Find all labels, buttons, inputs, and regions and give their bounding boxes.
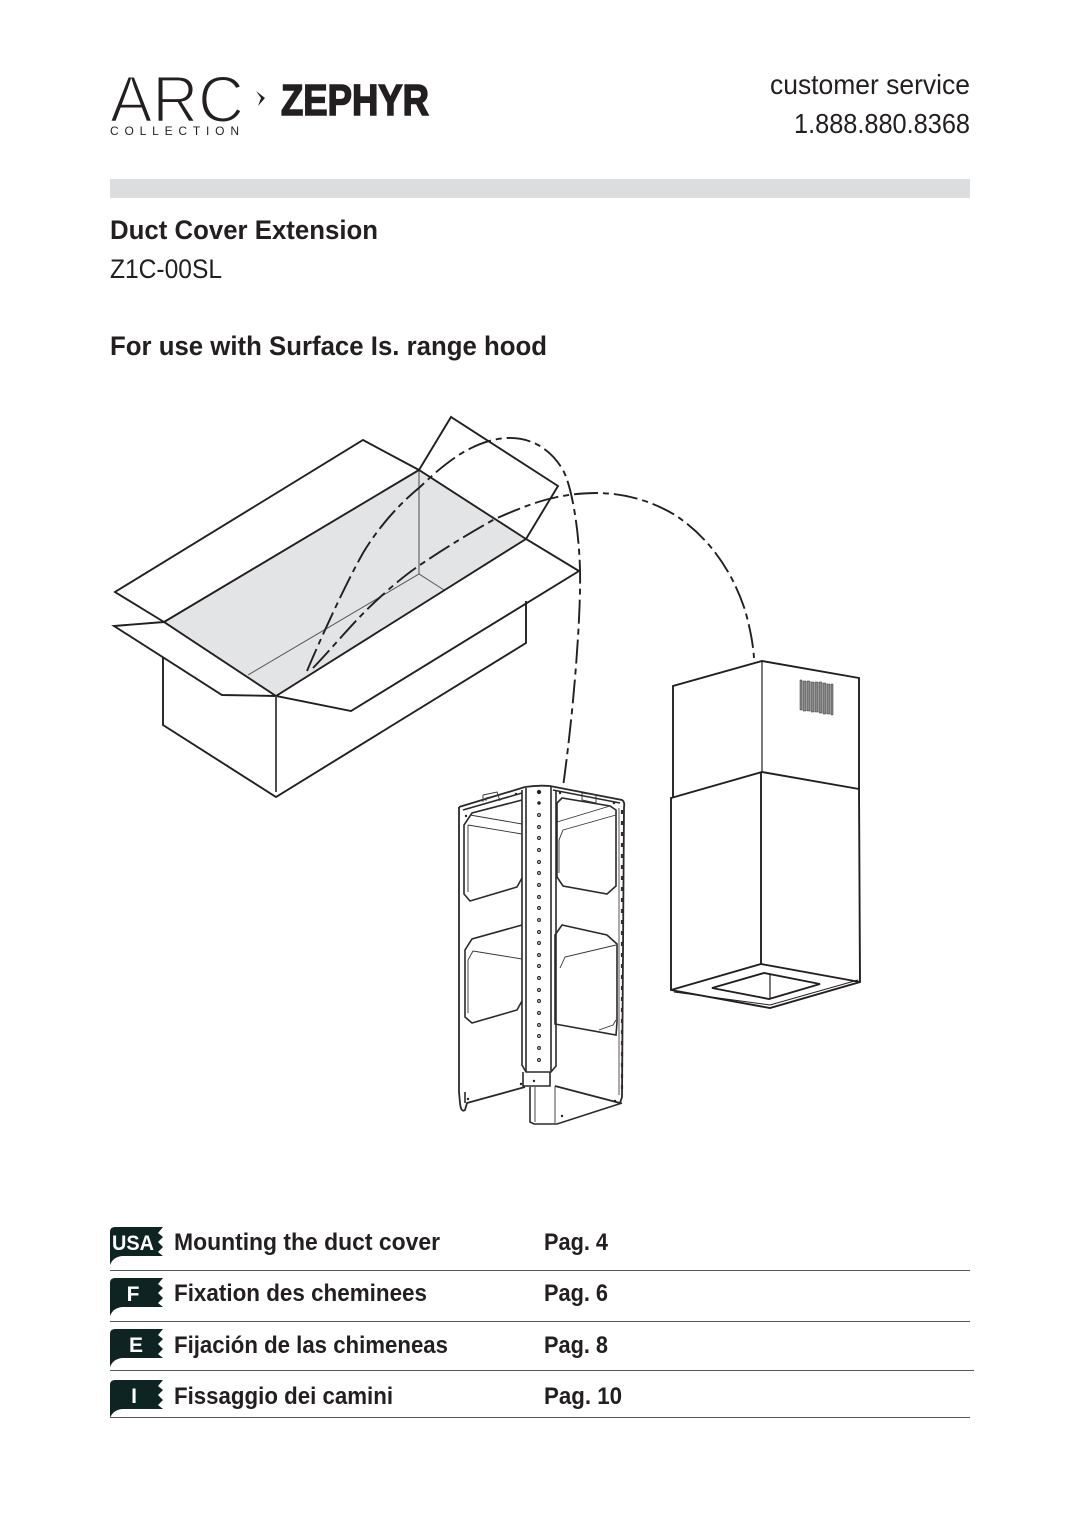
lower right window	[555, 925, 617, 1035]
row: Italian: Fissaggio dei camini	[174, 1383, 393, 1410]
icon: vent slots	[800, 680, 833, 715]
row: USA	[110, 1227, 609, 1265]
logo: ARC Collection and Zephyr: ZEPHYR	[281, 76, 429, 125]
customer service contact	[770, 69, 970, 139]
heading: compatibility: For use with Surface Is. range hood	[110, 331, 547, 361]
row: Spanish: Fijación de las chimeneas	[174, 1332, 448, 1359]
upper left window	[464, 800, 522, 901]
logo: ARC Collection and Zephyr: COLLECTION	[110, 124, 244, 138]
row: Italian: Pag. 10	[544, 1383, 622, 1410]
icon: F flag tab	[110, 1278, 163, 1316]
icon: F flag tab: F	[127, 1283, 140, 1306]
icon: USA flag tab: USA	[112, 1232, 154, 1255]
row: French	[110, 1278, 608, 1316]
icon: I flag tab	[110, 1380, 163, 1418]
logo: ARC Collection and Zephyr: ARC	[110, 62, 244, 136]
illustration: assembled duct cover hood	[671, 661, 860, 1008]
illustration: duct cover bracket frame	[459, 786, 624, 1124]
model number: Z1C-00SL	[110, 254, 222, 284]
row: Spanish	[110, 1329, 608, 1367]
icon: I flag tab: I	[131, 1385, 137, 1408]
upper right window	[557, 798, 616, 894]
lower left window	[465, 925, 522, 1023]
row: French: Fixation des cheminees	[174, 1280, 427, 1307]
icon: E flag tab: E	[129, 1334, 143, 1357]
row: French: Pag. 6	[544, 1280, 608, 1307]
row: USA: Mounting the duct cover	[174, 1229, 440, 1256]
rivet column	[537, 790, 541, 1061]
illustration: open cardboard box	[114, 417, 579, 797]
icon: E flag tab	[110, 1329, 163, 1367]
arrow: dashed path from box to hood	[313, 493, 754, 668]
row: Italian	[110, 1380, 622, 1418]
grey header bar	[110, 179, 970, 198]
arrow: dashed path from box to bracket	[307, 438, 580, 787]
customer service contact: 1.888.880.8368	[794, 108, 970, 139]
row: Spanish: Pag. 8	[544, 1332, 608, 1359]
customer service contact: customer service	[770, 69, 970, 100]
row: USA: Pag. 4	[544, 1229, 609, 1256]
icon: USA flag tab	[110, 1227, 163, 1265]
logo: ARC Collection and Zephyr	[110, 62, 429, 138]
heading: product title: Duct Cover Extension	[110, 215, 378, 245]
